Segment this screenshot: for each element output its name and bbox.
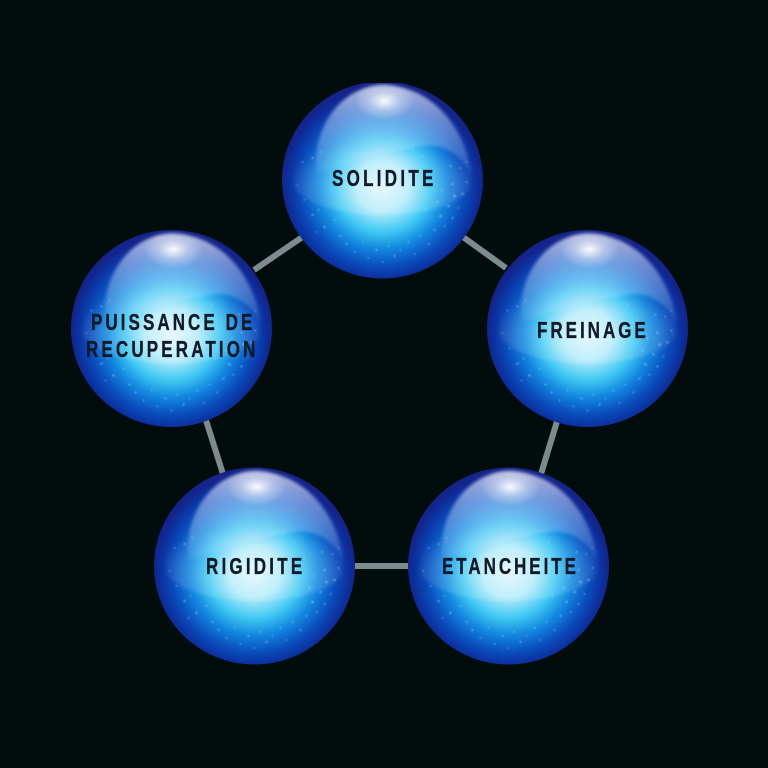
node: rigidite <box>154 468 355 664</box>
pentagon cycle diagram <box>71 83 688 664</box>
node: etancheite: ETANCHEITE <box>442 555 576 580</box>
node: rigidite: RIGIDITE <box>206 555 302 580</box>
node: puissance de recuperation <box>71 230 272 427</box>
node: puissance de recuperation: PUISSANCE DE <box>91 311 252 336</box>
node: solidite <box>282 82 483 278</box>
node: freinage: FREINAGE <box>537 319 646 344</box>
node: etancheite <box>408 468 609 664</box>
node: freinage <box>487 230 688 427</box>
connector lines <box>198 224 565 566</box>
node: solidite: SOLIDITE <box>332 167 433 192</box>
node: puissance de recuperation: RECUPERATION <box>86 338 255 363</box>
